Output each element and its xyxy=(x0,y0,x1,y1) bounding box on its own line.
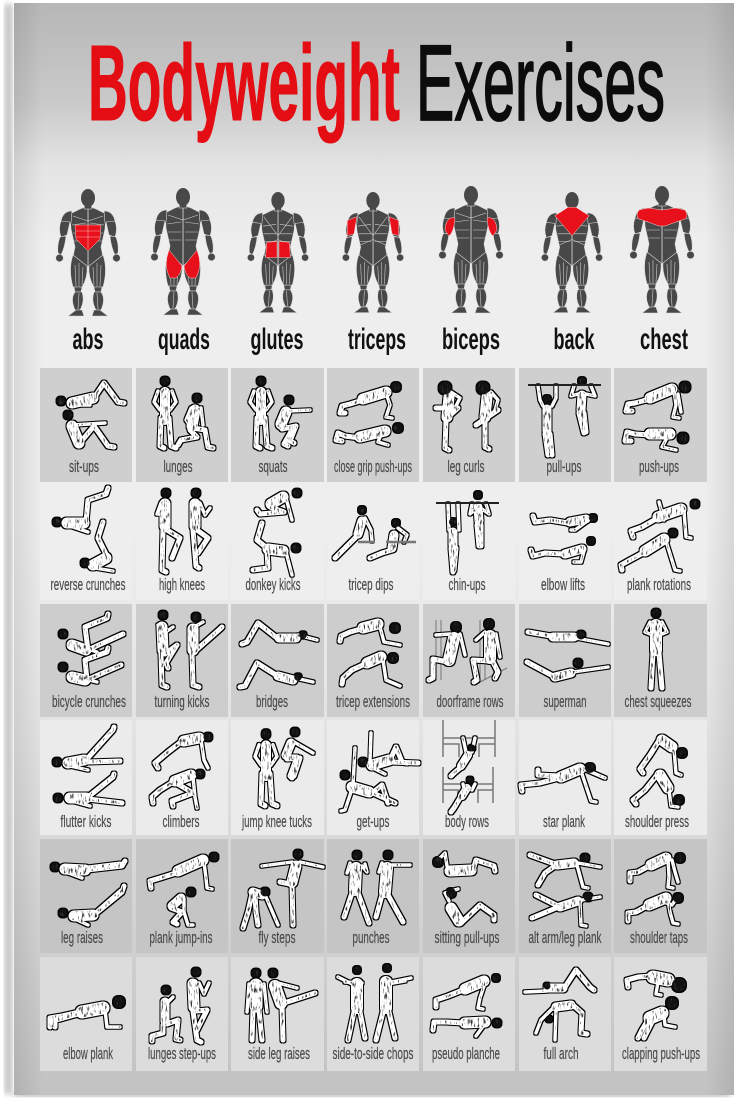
figure: lunges step-ups xyxy=(152,968,209,1042)
panel: body rows xyxy=(423,720,515,835)
panel: lunges step-ups xyxy=(136,957,228,1071)
figure: clapping push-ups xyxy=(627,976,686,1038)
figure: bridges xyxy=(240,623,317,687)
chairs xyxy=(443,720,495,803)
figure: star plank xyxy=(521,763,605,802)
panel: reverse crunches xyxy=(40,486,132,600)
panel: squats xyxy=(231,368,324,482)
figure: plank jump-ins xyxy=(150,852,218,925)
label: doorframe rows xyxy=(436,692,504,711)
label: chin-ups xyxy=(448,575,486,594)
chin-up bar xyxy=(436,502,499,504)
panel: bicycle crunches xyxy=(40,604,132,717)
figure: chest xyxy=(630,186,694,313)
label: squats xyxy=(258,457,288,476)
panel: doorframe rows xyxy=(423,604,515,717)
panel: lunges xyxy=(136,368,228,482)
figure: get-ups xyxy=(340,733,418,811)
panel: tricep extensions xyxy=(327,604,419,717)
label: side-to-side chops xyxy=(332,1044,414,1063)
figure: bicycle crunches xyxy=(58,614,123,682)
figure: punches xyxy=(344,850,410,923)
figure: high knees xyxy=(157,488,210,572)
label: glutes: glutes xyxy=(250,323,304,356)
label: shoulder taps xyxy=(630,928,688,947)
panel: alt arm/leg plank xyxy=(519,839,611,953)
label: biceps: biceps xyxy=(442,323,500,356)
panel: clapping push-ups xyxy=(614,957,707,1071)
figure: donkey kicks xyxy=(253,488,302,575)
panel: plank jump-ins xyxy=(136,839,228,953)
figure: quads xyxy=(151,188,215,315)
label: jump knee tucks xyxy=(241,812,312,831)
pull-up bar xyxy=(528,384,601,386)
figure: plank rotations xyxy=(621,500,700,571)
panel: side leg raises xyxy=(231,957,324,1071)
figure: climbers xyxy=(152,732,212,808)
figure: reverse crunches xyxy=(52,488,113,571)
label: high knees xyxy=(159,575,205,594)
figure: body rows xyxy=(451,738,476,812)
figure: squats xyxy=(250,376,310,448)
label: leg curls xyxy=(448,457,484,476)
figure: flutter kicks xyxy=(52,727,122,806)
label: shoulder press xyxy=(625,812,689,831)
label: sit-ups xyxy=(69,457,99,476)
label: star plank xyxy=(543,812,585,831)
label: push-ups xyxy=(639,457,679,476)
label: elbow plank xyxy=(63,1044,113,1063)
figure: superman xyxy=(527,630,608,677)
panel: sitting pull-ups xyxy=(423,839,515,953)
label: quads: quads xyxy=(158,323,210,356)
figure: fly steps xyxy=(243,850,323,928)
figure: tricep extensions xyxy=(340,623,400,686)
label: side leg raises xyxy=(248,1044,310,1063)
label: lunges xyxy=(164,457,192,476)
label: tricep dips xyxy=(348,575,394,594)
panel: push-ups xyxy=(614,368,707,482)
figure: side-to-side chops xyxy=(338,964,411,1040)
label: superman xyxy=(544,692,586,711)
label: triceps: triceps xyxy=(348,323,406,356)
label: get-ups xyxy=(356,812,390,831)
panel: leg raises xyxy=(40,839,132,953)
panel: pseudo planche xyxy=(423,957,515,1071)
figure: pull-ups xyxy=(538,377,595,455)
figure: elbow plank xyxy=(50,996,125,1027)
panel: shoulder press xyxy=(614,720,707,835)
figure: lunges xyxy=(154,376,213,448)
figure: alt arm/leg plank xyxy=(530,854,600,926)
label: chest squeezes xyxy=(624,692,692,711)
panel: turning kicks xyxy=(136,604,228,717)
panel: bridges xyxy=(231,604,324,717)
label: back: back xyxy=(554,323,595,356)
panel: punches xyxy=(327,839,419,953)
label: bicycle crunches xyxy=(52,692,126,711)
label: fly steps xyxy=(258,928,296,947)
panel: elbow lifts xyxy=(519,486,611,600)
panel: high knees xyxy=(136,486,228,600)
label: full arch xyxy=(544,1044,578,1063)
label: climbers xyxy=(162,812,200,831)
figure: shoulder press xyxy=(633,739,687,807)
label: chest: chest xyxy=(640,323,688,356)
label: leg raises xyxy=(61,928,103,947)
figure: push-ups xyxy=(625,382,690,450)
panel: elbow plank xyxy=(40,957,132,1071)
label: plank rotations xyxy=(627,575,691,594)
figure: sit-ups xyxy=(56,383,124,447)
panel: leg curls xyxy=(423,368,515,482)
figure: tricep dips xyxy=(335,506,407,558)
figure: sitting pull-ups xyxy=(433,853,495,923)
figure: chest squeezes xyxy=(645,608,667,688)
label: donkey kicks xyxy=(246,575,300,594)
panel: climbers xyxy=(136,720,228,835)
label: sitting pull-ups xyxy=(434,928,500,947)
label: flutter kicks xyxy=(60,812,112,831)
panel: jump knee tucks xyxy=(231,720,324,835)
figure: back xyxy=(541,192,603,313)
panel: chin-ups xyxy=(423,486,515,600)
title: Bodyweight xyxy=(88,22,400,143)
label: abs: abs xyxy=(72,323,104,356)
figure: triceps xyxy=(342,192,404,313)
figure: elbow lifts xyxy=(531,514,597,562)
panel: shoulder taps xyxy=(614,839,707,953)
label: pseudo planche xyxy=(432,1044,500,1063)
panel: chest squeezes xyxy=(614,604,707,717)
figure: chin-ups xyxy=(448,491,489,572)
figure: shoulder taps xyxy=(628,853,685,924)
panel: tricep dips xyxy=(327,486,419,600)
figure: close grip push-ups xyxy=(336,382,403,445)
label: plank jump-ins xyxy=(150,928,212,947)
label: turning kicks xyxy=(154,692,210,711)
label: close grip push-ups xyxy=(334,457,412,476)
figure: biceps xyxy=(439,186,503,313)
figure: full arch xyxy=(525,970,594,1040)
label: elbow lifts xyxy=(541,575,585,594)
label: punches xyxy=(352,928,390,947)
figure: pseudo planche xyxy=(433,974,502,1036)
figure: side leg raises xyxy=(247,968,315,1040)
figure: glutes xyxy=(247,192,309,313)
label: reverse crunches xyxy=(50,575,126,594)
figure: leg curls xyxy=(436,382,498,450)
panel: pull-ups xyxy=(519,368,611,482)
figure: leg raises xyxy=(50,861,125,925)
figure: jump knee tucks xyxy=(255,728,313,806)
figure: doorframe rows xyxy=(429,619,500,682)
panel: close grip push-ups xyxy=(327,368,419,482)
panel: get-ups xyxy=(327,720,419,835)
panel: side-to-side chops xyxy=(327,957,419,1071)
dip bars xyxy=(358,541,416,543)
label: bridges xyxy=(256,692,288,711)
panel: muscle groups xyxy=(56,186,694,356)
label: lunges step-ups xyxy=(148,1044,216,1063)
panel: fly steps xyxy=(231,839,324,953)
figure: abs xyxy=(56,189,120,316)
label: body rows xyxy=(445,812,489,831)
door frames xyxy=(436,620,507,682)
figure: turning kicks xyxy=(158,610,222,687)
label: alt arm/leg plank xyxy=(528,928,602,947)
panel: full arch xyxy=(519,957,611,1071)
label: pull-ups xyxy=(546,457,582,476)
label: tricep extensions xyxy=(336,692,410,711)
panel: donkey kicks xyxy=(231,486,324,600)
panel: sit-ups xyxy=(40,368,132,482)
panel: flutter kicks xyxy=(40,720,132,835)
panel: superman xyxy=(519,604,611,717)
panel: star plank xyxy=(519,720,611,835)
panel: plank rotations xyxy=(614,486,707,600)
